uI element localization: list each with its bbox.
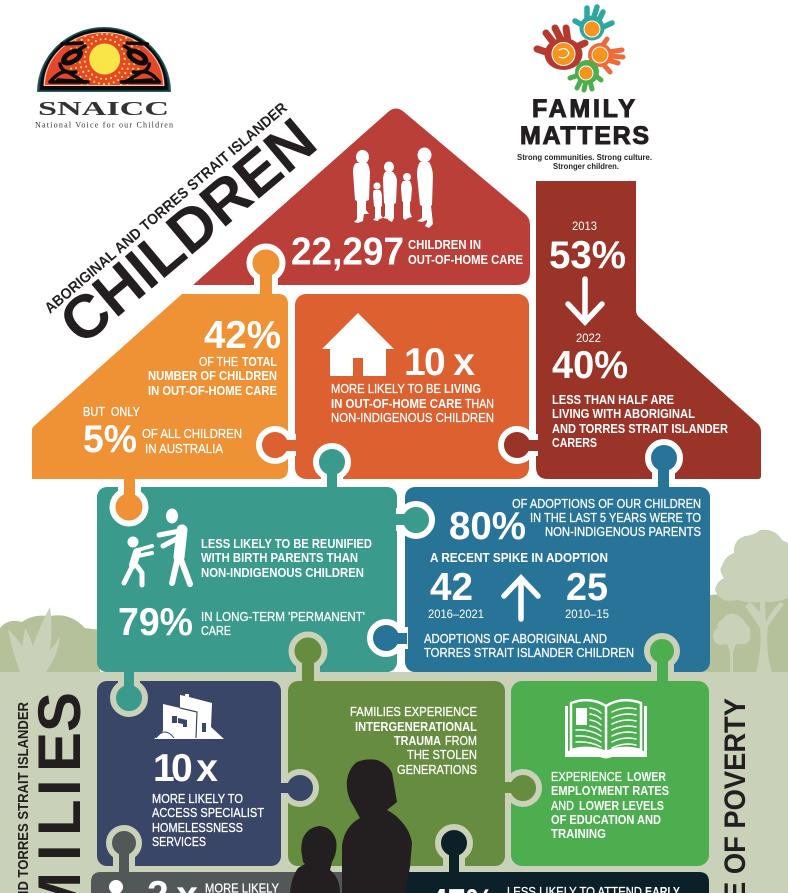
- panel: homelessness: [97, 681, 281, 866]
- stat: 22,297: 22,297: [291, 230, 404, 274]
- icon: houses: [154, 694, 224, 739]
- icon: family silhouettes: [353, 148, 433, 228]
- panel: 42 percent of children: OF ALL CHILDREN: [142, 427, 242, 441]
- panel: 10 times more likely to be living in care: IN OUT-OF-HOME CARE: [331, 397, 462, 411]
- panel: 10 times more likely to be living in care: MORE LIKELY TO BE: [331, 382, 441, 396]
- panel: employment and education: LOWER: [627, 770, 666, 784]
- panel: homelessness: MORE LIKELY TO: [152, 792, 243, 806]
- panel: homelessness: SERVICES: [152, 835, 206, 849]
- panel: 10 times more likely to be living in care: LIVING: [444, 382, 481, 396]
- panel: employment and education: AND: [551, 799, 574, 813]
- illustration: parent and child silhouettes: [290, 759, 412, 893]
- panel: reunification: [97, 487, 397, 672]
- SNAICC logo: National Voice for our Children: [35, 120, 173, 130]
- panel: adoption: TORRES STRAIT ISLANDER CHILDREN: [424, 646, 634, 660]
- Family Matters logo: Strong communities. Strong culture.: [517, 152, 652, 162]
- panel: reunification: 79%: [118, 601, 193, 644]
- panel: adoption: A RECENT SPIKE IN ADOPTION: [430, 551, 608, 565]
- panel: adoption: IN THE LAST 5 YEARS WERE TO: [530, 511, 701, 525]
- SNAICC logo: [35, 24, 173, 130]
- panel: employment and education: EXPERIENCE: [551, 770, 622, 784]
- panel: homelessness: ACCESS SPECIALIST: [152, 806, 264, 820]
- Family Matters logo: MATTERS: [520, 122, 649, 150]
- panel: kinship carers: CARERS: [552, 436, 597, 450]
- panel: 10 times more likely to be living in care: [295, 294, 529, 479]
- panel: kinship carers: [536, 181, 761, 479]
- panel: kinship carers: LESS THAN HALF ARE: [552, 393, 674, 407]
- panel: employment and education: LOWER LEVELS: [579, 799, 664, 813]
- icon: four hands: [537, 7, 623, 90]
- panel: employment and education: TRAINING: [551, 827, 606, 841]
- icon: house: [322, 313, 394, 376]
- panel: reunification: NON-INDIGENOUS CHILDREN: [201, 566, 364, 580]
- panel: employment and education: [511, 681, 709, 866]
- panel: homelessness: 10 x: [153, 747, 218, 790]
- panel: adoption: 80%: [449, 505, 526, 548]
- Family Matters logo: FAMILY: [532, 95, 635, 123]
- panel: kinship carers: 2013: [572, 221, 597, 233]
- panel: reunification: IN LONG-TERM 'PERMANENT': [201, 610, 365, 624]
- icon: person head: [109, 880, 123, 893]
- panel: kinship carers: 40%: [552, 344, 628, 387]
- Family Matters logo: [517, 7, 652, 171]
- panel: intergenerational trauma: FAMILIES EXPERIENCE: [350, 705, 477, 719]
- panel: homelessness: HOMELESSNESS: [152, 821, 243, 835]
- panel: adoption: ADOPTIONS OF ABORIGINAL AND: [424, 632, 607, 646]
- panel: 42 percent of children: TOTAL: [242, 355, 277, 369]
- panel: 2 x more likely: [91, 872, 410, 893]
- puzzle tabs: [109, 246, 680, 874]
- panel: kinship carers: AND TORRES STRAIT ISLANDER: [552, 422, 728, 436]
- panel: adoption: NON-INDIGENOUS PARENTS: [545, 525, 701, 539]
- panel: children in care: [193, 108, 530, 285]
- panel: reunification: WITH BIRTH PARENTS THAN: [201, 551, 358, 565]
- panel: kinship carers: LIVING WITH ABORIGINAL: [552, 407, 695, 421]
- panel: reunification: LESS LIKELY TO BE REUNIFIED: [201, 537, 372, 551]
- arrow: down: [568, 279, 602, 322]
- panel: intergenerational trauma: INTERGENERATIONAL: [355, 720, 477, 734]
- panel: reunification: CARE: [201, 624, 231, 638]
- panel: 42 percent of children: IN OUT-OF-HOME CARE: [148, 384, 277, 398]
- icon: adult and child: [124, 508, 190, 585]
- panel: 10 times more likely to be living in care: NON-INDIGENOUS CHILDREN: [331, 411, 494, 425]
- panel: 42 percent of children: OF THE: [199, 355, 238, 369]
- panel: 42 percent of children: 42%: [204, 314, 281, 357]
- panel: adoption: 42: [430, 566, 473, 609]
- arrow: up: [504, 578, 538, 619]
- title: Aboriginal and Torres Strait Islander children: CHILDREN: [47, 105, 329, 357]
- panel: early childhood attendance: [400, 872, 709, 893]
- panel: employment and education: EMPLOYMENT RATES: [551, 784, 669, 798]
- panel: intergenerational trauma: GENERATIONS: [397, 763, 477, 777]
- panel: 10 times more likely to be living in care: 10 x: [404, 341, 475, 384]
- panel: 42 percent of children: BUT ONLY: [83, 405, 141, 419]
- stat: 22,297: OUT-OF-HOME CARE: [408, 253, 523, 267]
- panel: intergenerational trauma: TRAUMA: [394, 734, 441, 748]
- Family Matters logo: Stronger children.: [553, 161, 619, 171]
- stat: 22,297: [291, 230, 523, 274]
- stat: 22,297: CHILDREN IN: [408, 238, 481, 252]
- panel: adoption: [405, 487, 710, 672]
- panel: 10 times more likely to be living in care: THAN: [465, 397, 494, 411]
- icon: open book: [565, 700, 647, 758]
- panel: 42 percent of children: NUMBER OF CHILDREN: [148, 369, 277, 383]
- SNAICC logo: SNAICC: [38, 98, 169, 120]
- panel: adoption: 2010–15: [565, 609, 609, 621]
- panel: intergenerational trauma: [288, 681, 505, 866]
- panel: adoption: 2016–2021: [428, 609, 484, 621]
- panel: kinship carers: 53%: [549, 234, 626, 277]
- panel: 42 percent of children: 5%: [83, 418, 137, 461]
- panel: employment and education: OF EDUCATION AND: [551, 813, 661, 827]
- panel: intergenerational trauma: THE STOLEN: [407, 748, 477, 762]
- title: Aboriginal and Torres Strait Islander children: ABORIGINAL AND TORRES STRAIT ISLANDER: [42, 99, 291, 317]
- panel: adoption: OF ADOPTIONS OF OUR CHILDREN: [512, 497, 701, 511]
- panel: 42 percent of children: [32, 294, 288, 479]
- panel: 42 percent of children: IN AUSTRALIA: [145, 442, 224, 456]
- panel: kinship carers: 2022: [576, 333, 601, 345]
- panel: adoption: 25: [566, 566, 608, 609]
- panel: intergenerational trauma: FROM: [445, 734, 477, 748]
